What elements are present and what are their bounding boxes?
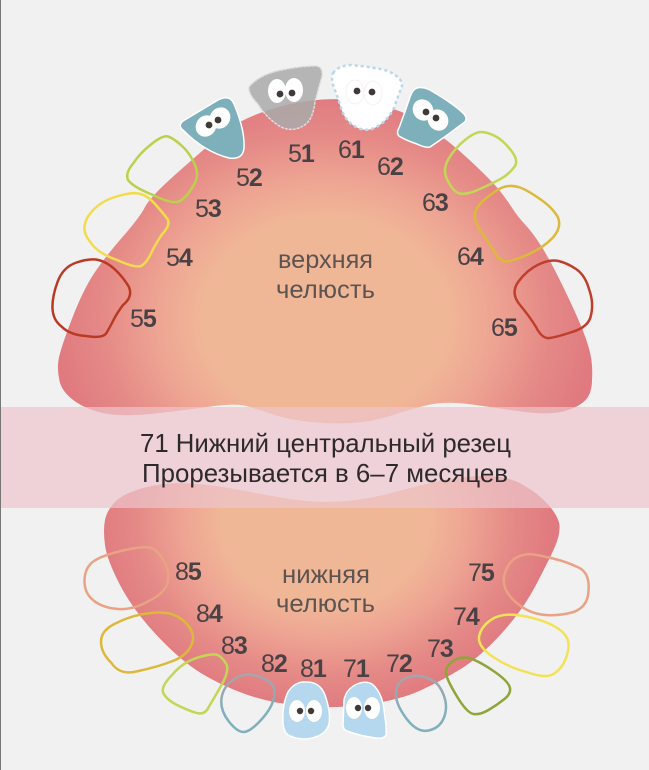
tooth numbers: 54 [166,244,193,272]
tooth numbers: 61 [338,136,365,164]
tooth outline 73 [446,657,510,714]
tooth outline 54 [84,193,168,266]
tooth numbers: 82 [261,650,287,678]
tooth numbers: 63 [422,189,448,217]
tooth outline 53 [127,136,197,202]
tooth 62 [398,88,466,147]
info text: Прорезывается в 6–7 месяцев [142,458,508,488]
lower jaw label: нижняя [282,561,370,589]
tooth outline 82 [221,675,274,732]
tooth numbers: 53 [195,195,221,223]
tooth numbers: 71 [343,655,370,683]
tooth numbers [130,136,518,683]
tooth outline 55 [52,259,130,337]
upper jaw [58,99,592,423]
info band [1,407,649,508]
tooth outline 75 [504,554,589,615]
upper jaw label: верхняя [278,246,373,274]
upper jaw label [276,246,375,304]
tooth outline 72 [396,676,446,731]
info text [140,428,511,488]
tooth outline 85 [84,547,168,609]
tooth outline 83 [163,654,227,713]
tooth 52 [180,98,244,158]
tooth outline 64 [475,186,559,262]
tooth outline 84 [101,612,193,672]
upper jaw label: челюсть [276,276,375,304]
lower jaw [104,476,560,707]
tooth 81 [283,682,330,739]
lower jaw label [276,561,375,618]
tooth outline 65 [515,260,592,338]
tooth numbers: 51 [288,140,315,168]
tooth 61 [332,65,402,130]
tooth outline 74 [479,615,569,676]
tooth numbers: 74 [453,603,480,631]
tooth numbers: 62 [377,153,403,181]
tooth numbers: 85 [175,558,202,586]
lower jaw label: челюсть [276,590,375,618]
tooth numbers: 81 [300,655,327,683]
info text: 71 Нижний центральный резец [140,428,511,458]
tooth numbers: 65 [491,314,518,342]
tooth 51 [249,66,322,129]
tooth numbers: 73 [427,635,453,663]
tooth 71 [343,682,386,738]
tooth numbers: 84 [196,600,223,628]
tooth outline 63 [445,132,516,194]
tooth numbers: 64 [457,243,484,271]
tooth numbers: 83 [221,632,247,660]
tooth numbers: 52 [236,164,262,192]
tooth numbers: 72 [386,650,412,678]
tooth numbers: 55 [130,305,157,333]
tooth numbers: 75 [468,559,495,587]
